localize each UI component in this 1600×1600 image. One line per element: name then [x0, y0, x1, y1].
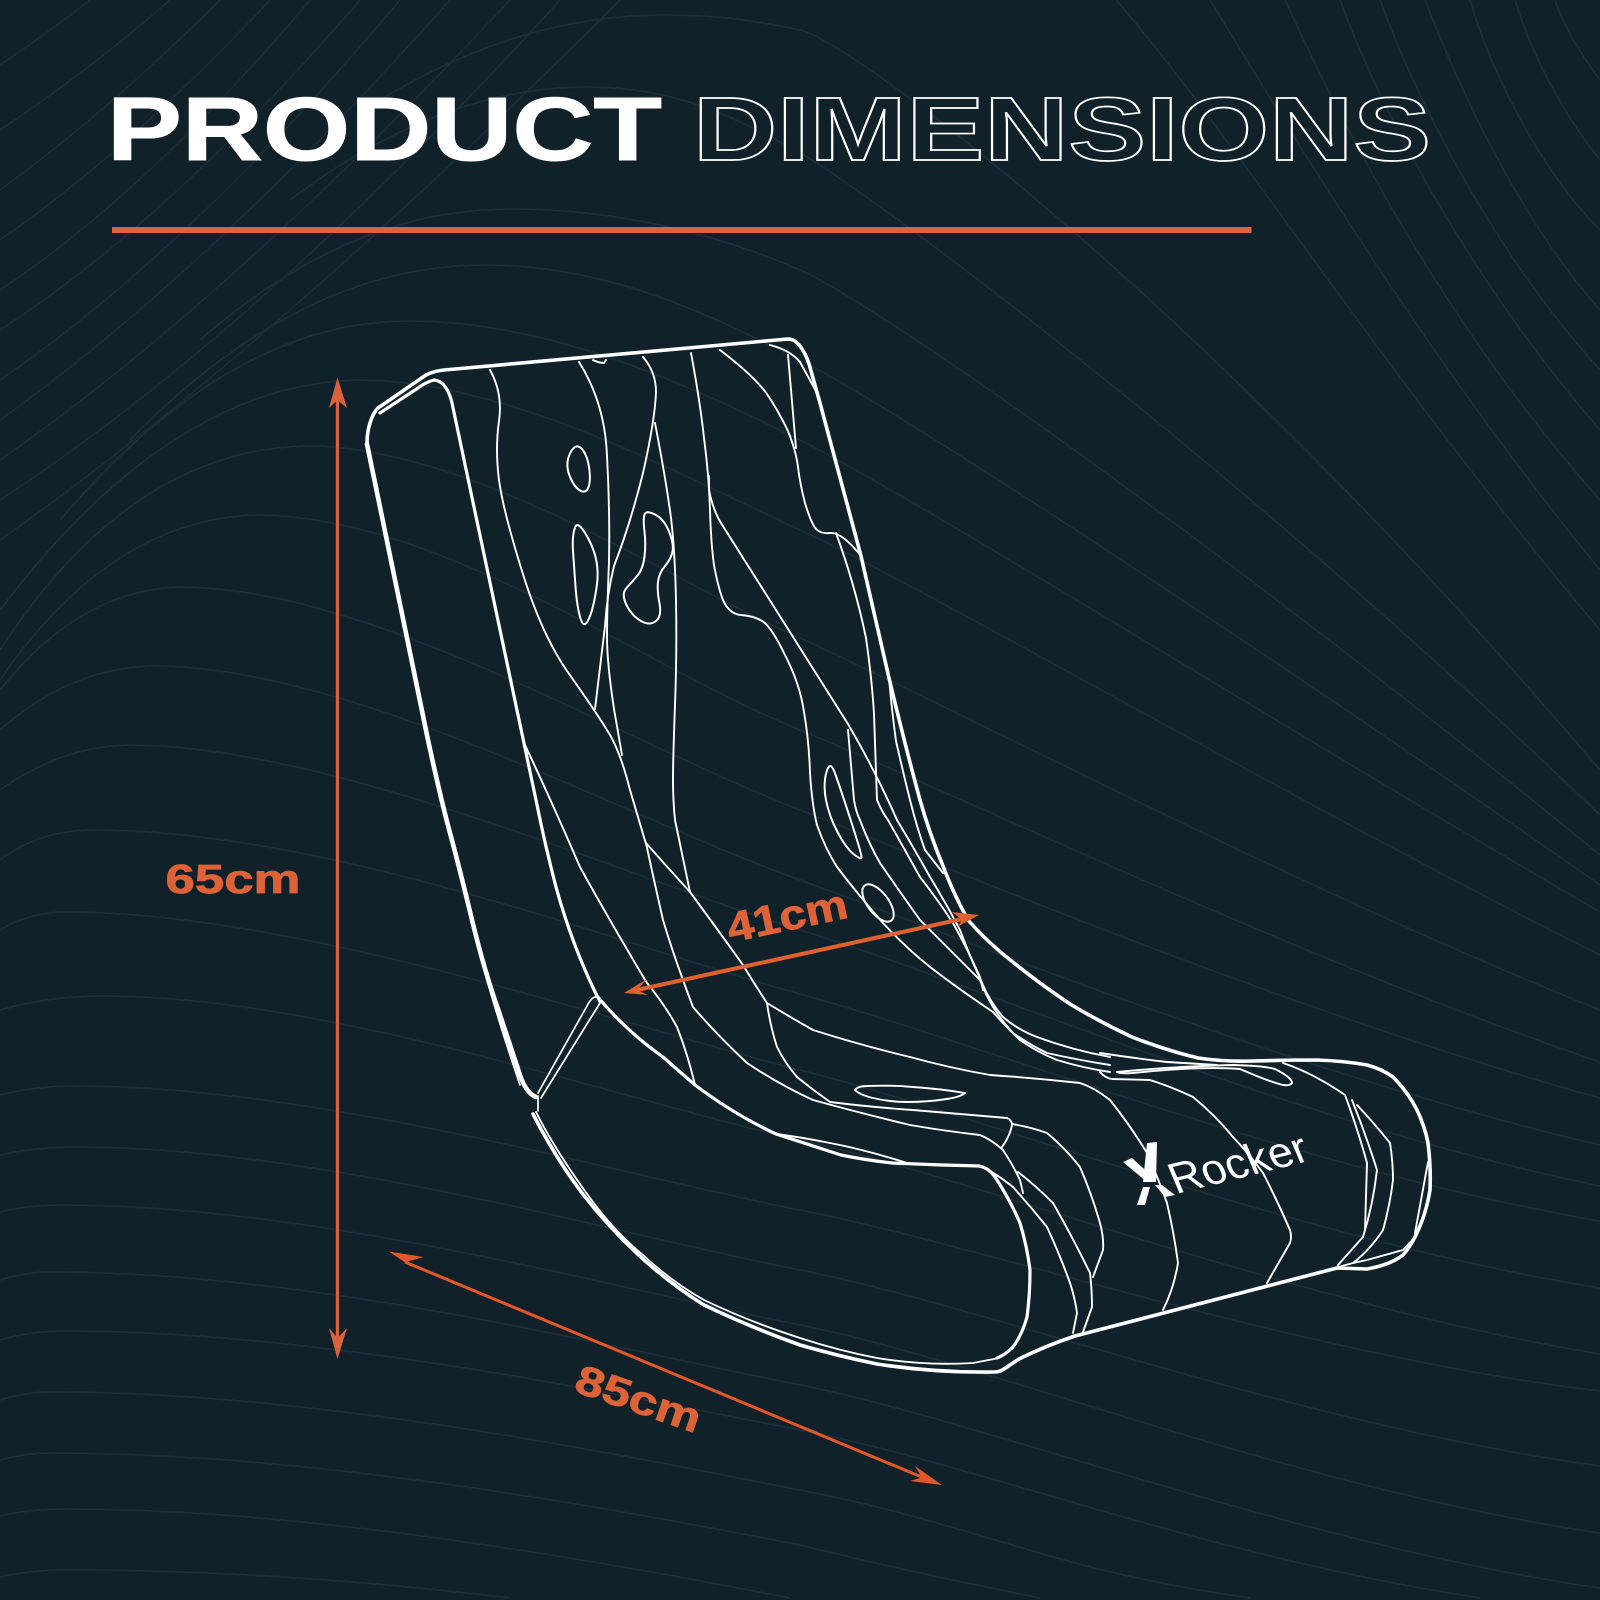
vent ovals on backrest: [567, 446, 900, 927]
front inner edge and armrest: [380, 380, 1030, 1358]
chair top, right and bottom outline: [367, 339, 1430, 1372]
backrest left edge: [367, 444, 536, 1097]
logo wordmark: Rocker: [1161, 1124, 1316, 1203]
width dimension arrow: [624, 912, 979, 995]
seat panel seams: [525, 745, 1428, 1333]
rocker base inner line: [536, 1112, 999, 1364]
depth label: 85cm: [570, 1356, 708, 1442]
side wedge fold: [485, 973, 600, 1111]
height dimension arrow: [329, 378, 347, 1359]
X Rocker logo: [1123, 1124, 1316, 1205]
logo X mark: [1123, 1142, 1175, 1205]
title underline rule: [112, 227, 1252, 233]
depth dimension arrow: [389, 1252, 942, 1485]
title word: PRODUCT: PRODUCT: [107, 80, 662, 180]
seat vent ovals: [855, 1065, 1292, 1102]
height label: 65cm: [166, 856, 300, 902]
width label: 41cm: [722, 880, 852, 951]
chair line drawing: [367, 339, 1430, 1372]
backrest panel seams: [490, 345, 1110, 1072]
title word: DIMENSIONS: DIMENSIONS: [693, 80, 1431, 180]
